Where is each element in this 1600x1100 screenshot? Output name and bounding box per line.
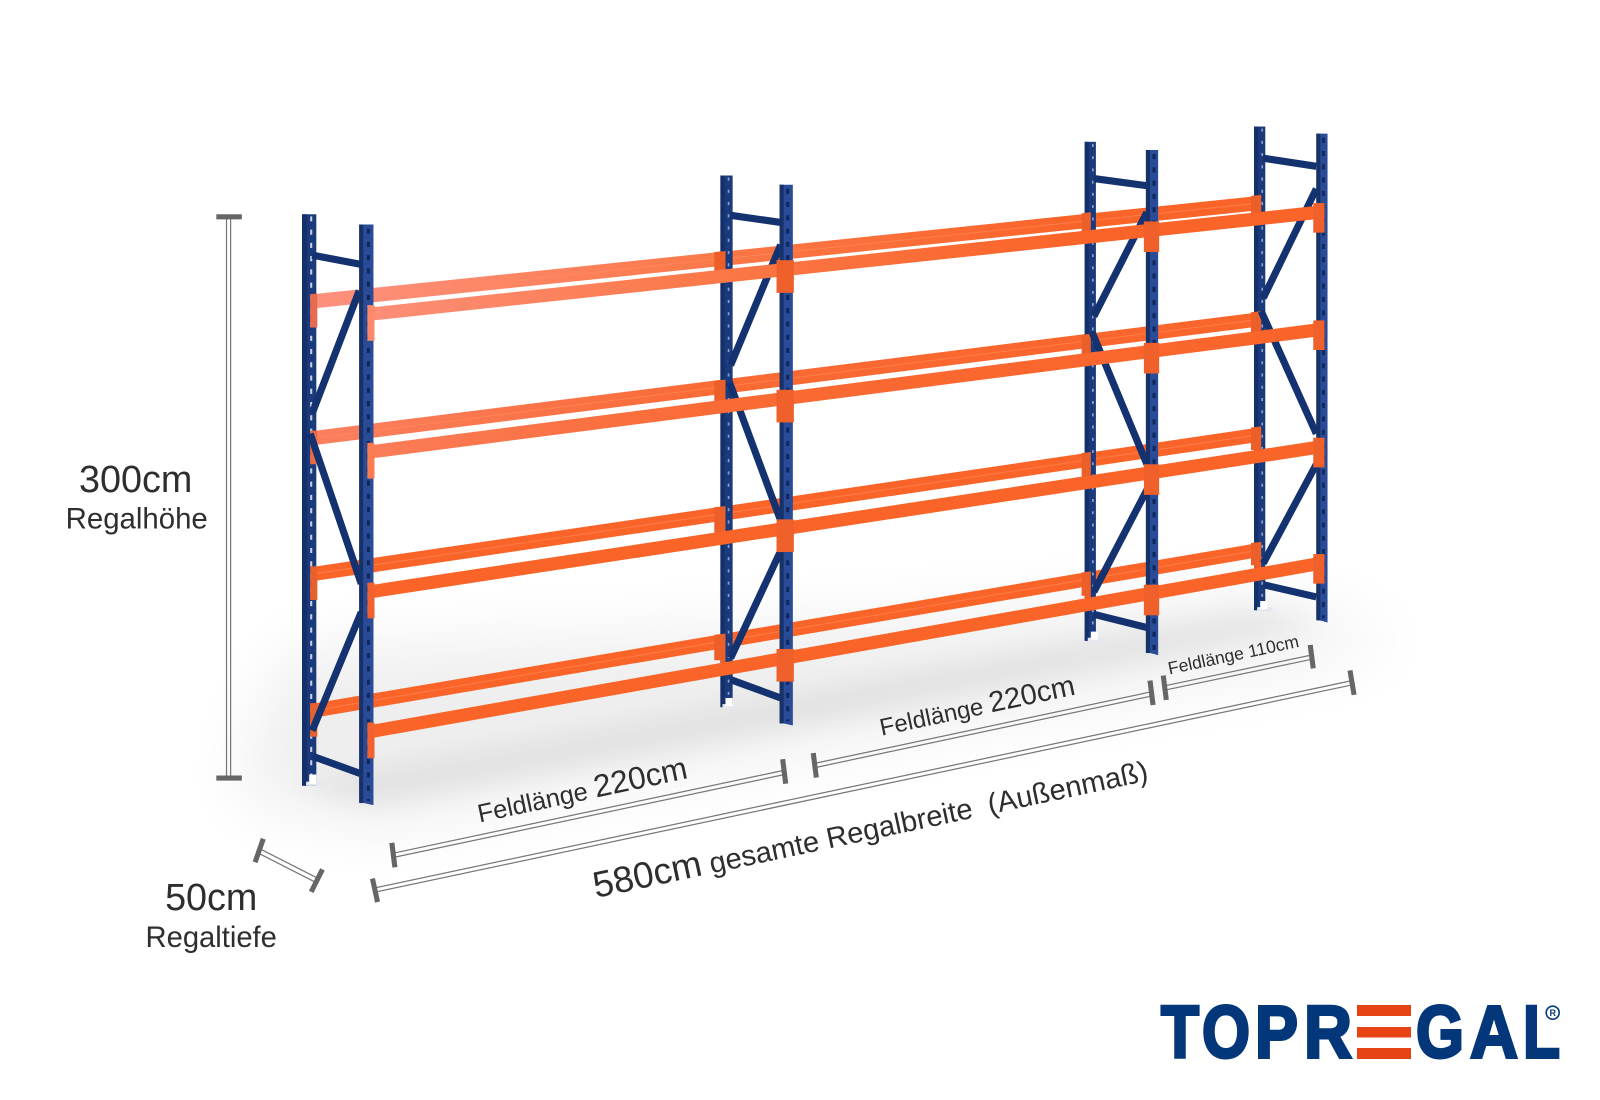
dimension: field 3 bar (1163, 645, 1313, 700)
logo: TOPREGAL: A (1470, 990, 1518, 1074)
frame 3 front post (1146, 150, 1158, 655)
logo: TOPREGAL: O (1202, 990, 1250, 1074)
frame 2 front post (780, 185, 793, 726)
label: height (66, 458, 208, 536)
pallet rack (302, 127, 1328, 805)
logo: TOPREGAL: R (1549, 1008, 1556, 1018)
logo: TOPREGAL: L (1523, 990, 1560, 1074)
frame 2 rear post (720, 176, 733, 707)
logo: TOPREGAL: G (1416, 990, 1464, 1074)
dimension: depth bar (255, 839, 322, 892)
label: field 3: Feldlänge 110cm (1166, 631, 1301, 678)
label: total width: 580cm gesamte Regalbreite (Außenmaß) (589, 748, 1151, 906)
label: height: Regalhöhe (66, 503, 208, 536)
rear beam connectors (310, 195, 1261, 737)
floor plates (306, 601, 1272, 786)
label: field 2: Feldlänge 220cm (876, 670, 1078, 743)
frame 4 rear post (1254, 127, 1265, 610)
dimension: field 1 bar (392, 759, 786, 867)
frame bracing (310, 158, 1316, 773)
rear beams (316, 196, 1259, 717)
label: depth (146, 876, 277, 954)
logo: TOPREGAL: P (1255, 990, 1298, 1074)
label: field 1: Feldlänge 220cm (474, 750, 690, 829)
label: depth: Regaltiefe (146, 922, 277, 954)
label: height: 300cm (79, 458, 192, 500)
front beams (373, 205, 1323, 738)
logo: TOPREGAL: R (1304, 990, 1352, 1074)
front beam connectors (367, 203, 1324, 758)
frame 1 front post (359, 224, 373, 805)
frame 4 front post (1316, 134, 1328, 622)
floor shadow (235, 597, 1408, 827)
logo: TOPREGAL (1161, 990, 1560, 1074)
dimension: field 2 bar (813, 681, 1153, 778)
dimension: total width bar (372, 670, 1354, 902)
frame 3 rear post (1085, 142, 1096, 641)
logo: TOPREGAL: T (1161, 990, 1199, 1074)
dimension: height bar (216, 214, 242, 781)
label: depth: 50cm (165, 876, 257, 918)
frame 1 rear post (302, 214, 316, 786)
